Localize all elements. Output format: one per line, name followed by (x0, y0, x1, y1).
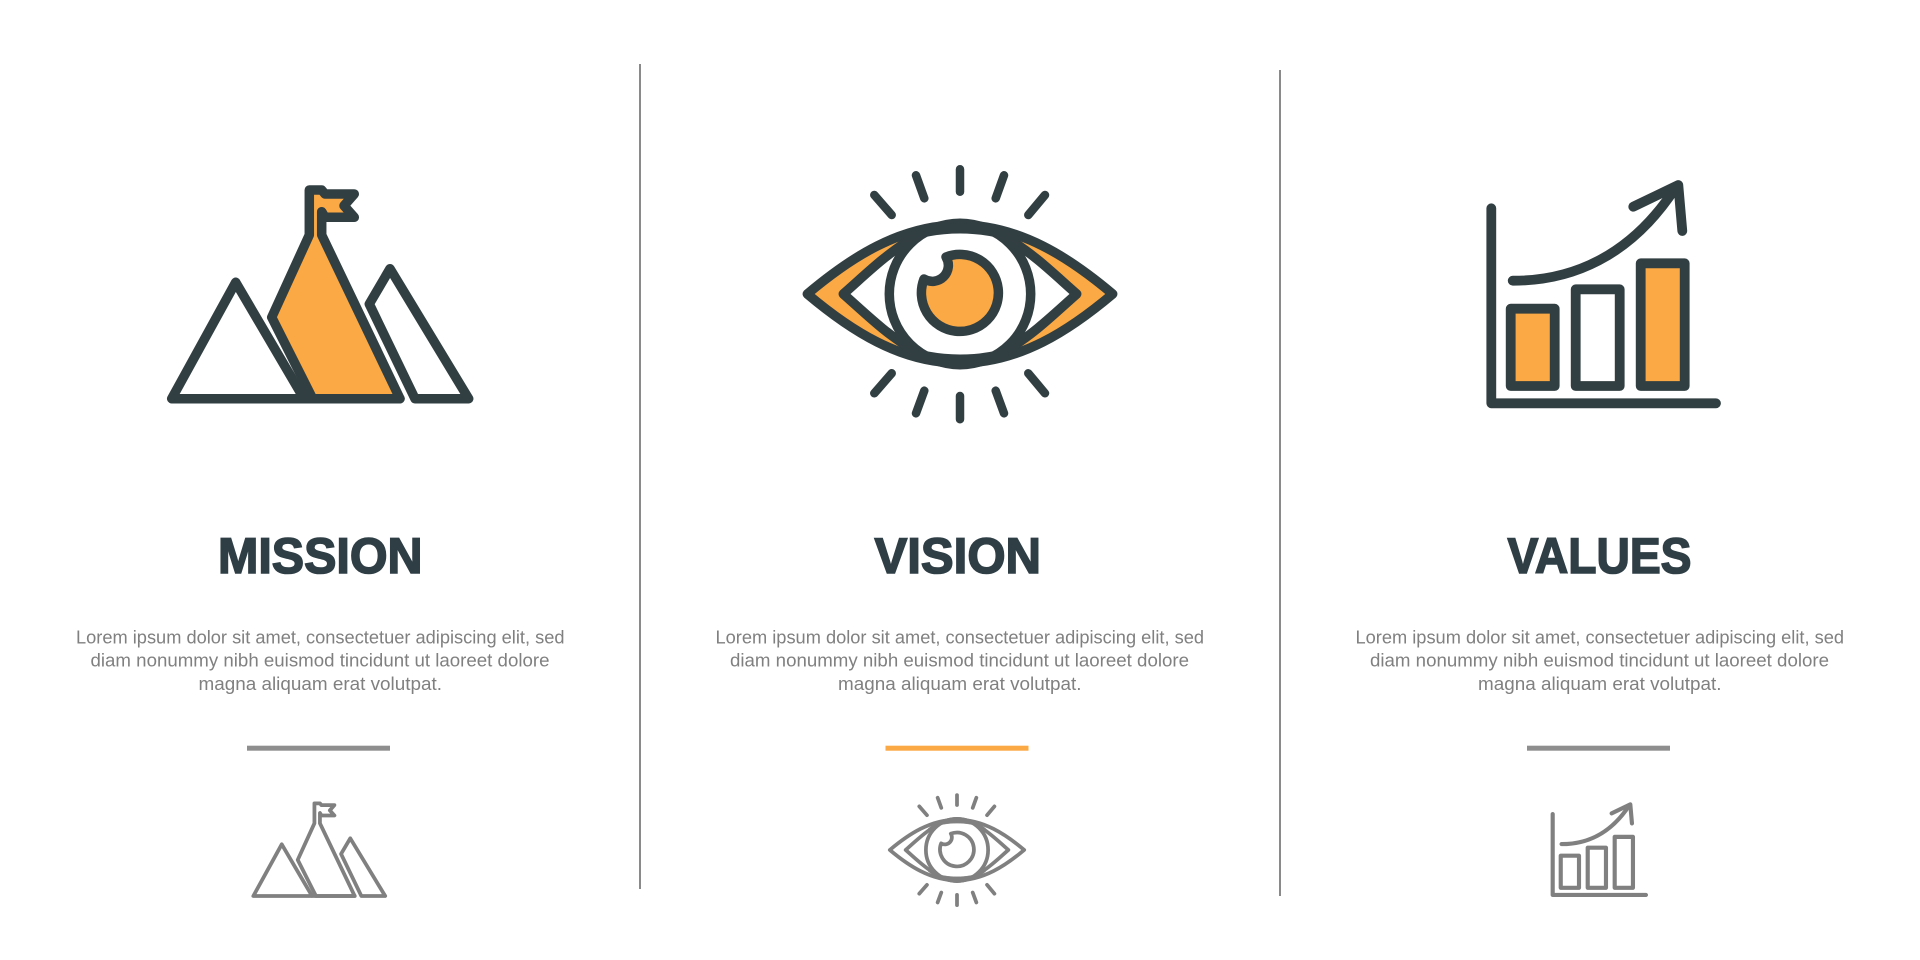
heading: vision: VISION (874, 528, 1041, 584)
icon: small bar chart outline (1553, 804, 1646, 895)
text block: mission description: diam nonummy nibh euismod tincidunt ut laoreet dolore (90, 650, 550, 671)
heading: values: VALUES (1508, 528, 1692, 584)
text block: mission description: Lorem ipsum dolor sit amet, consectetuer adipiscing elit, sed (76, 626, 564, 647)
divider: mission and vision (639, 64, 641, 889)
divider: vision and values (1279, 70, 1281, 896)
panel: vision (716, 169, 1204, 905)
heading: mission: MISSION (218, 528, 422, 584)
text block: values description: Lorem ipsum dolor sit amet, consectetuer adipiscing elit, sed (1356, 626, 1844, 647)
panel: mission (76, 190, 564, 896)
text block: vision description: Lorem ipsum dolor sit amet, consectetuer adipiscing elit, sed (716, 626, 1204, 647)
icon: small mountains outline (253, 803, 385, 896)
text block: mission description (76, 626, 564, 694)
panel: values (1356, 185, 1844, 895)
rule: vision (886, 746, 1028, 751)
icon: eye with rays (807, 169, 1113, 419)
icon: bar chart with rising arrow (1491, 185, 1716, 403)
text block: vision description (716, 626, 1204, 694)
text block: vision description: diam nonummy nibh euismod tincidunt ut laoreet dolore (730, 650, 1189, 671)
text block: mission description: magna aliquam erat volutpat. (198, 673, 442, 694)
rule: mission (247, 746, 390, 751)
text block: values description (1356, 626, 1844, 694)
text block: values description: diam nonummy nibh euismod tincidunt ut laoreet dolore (1370, 650, 1829, 671)
icon: small eye outline (890, 795, 1024, 905)
icon: mountains with flag (172, 190, 469, 399)
rule: values (1527, 746, 1670, 751)
text block: values description: magna aliquam erat volutpat. (1478, 673, 1722, 694)
text block: vision description: magna aliquam erat volutpat. (838, 673, 1082, 694)
